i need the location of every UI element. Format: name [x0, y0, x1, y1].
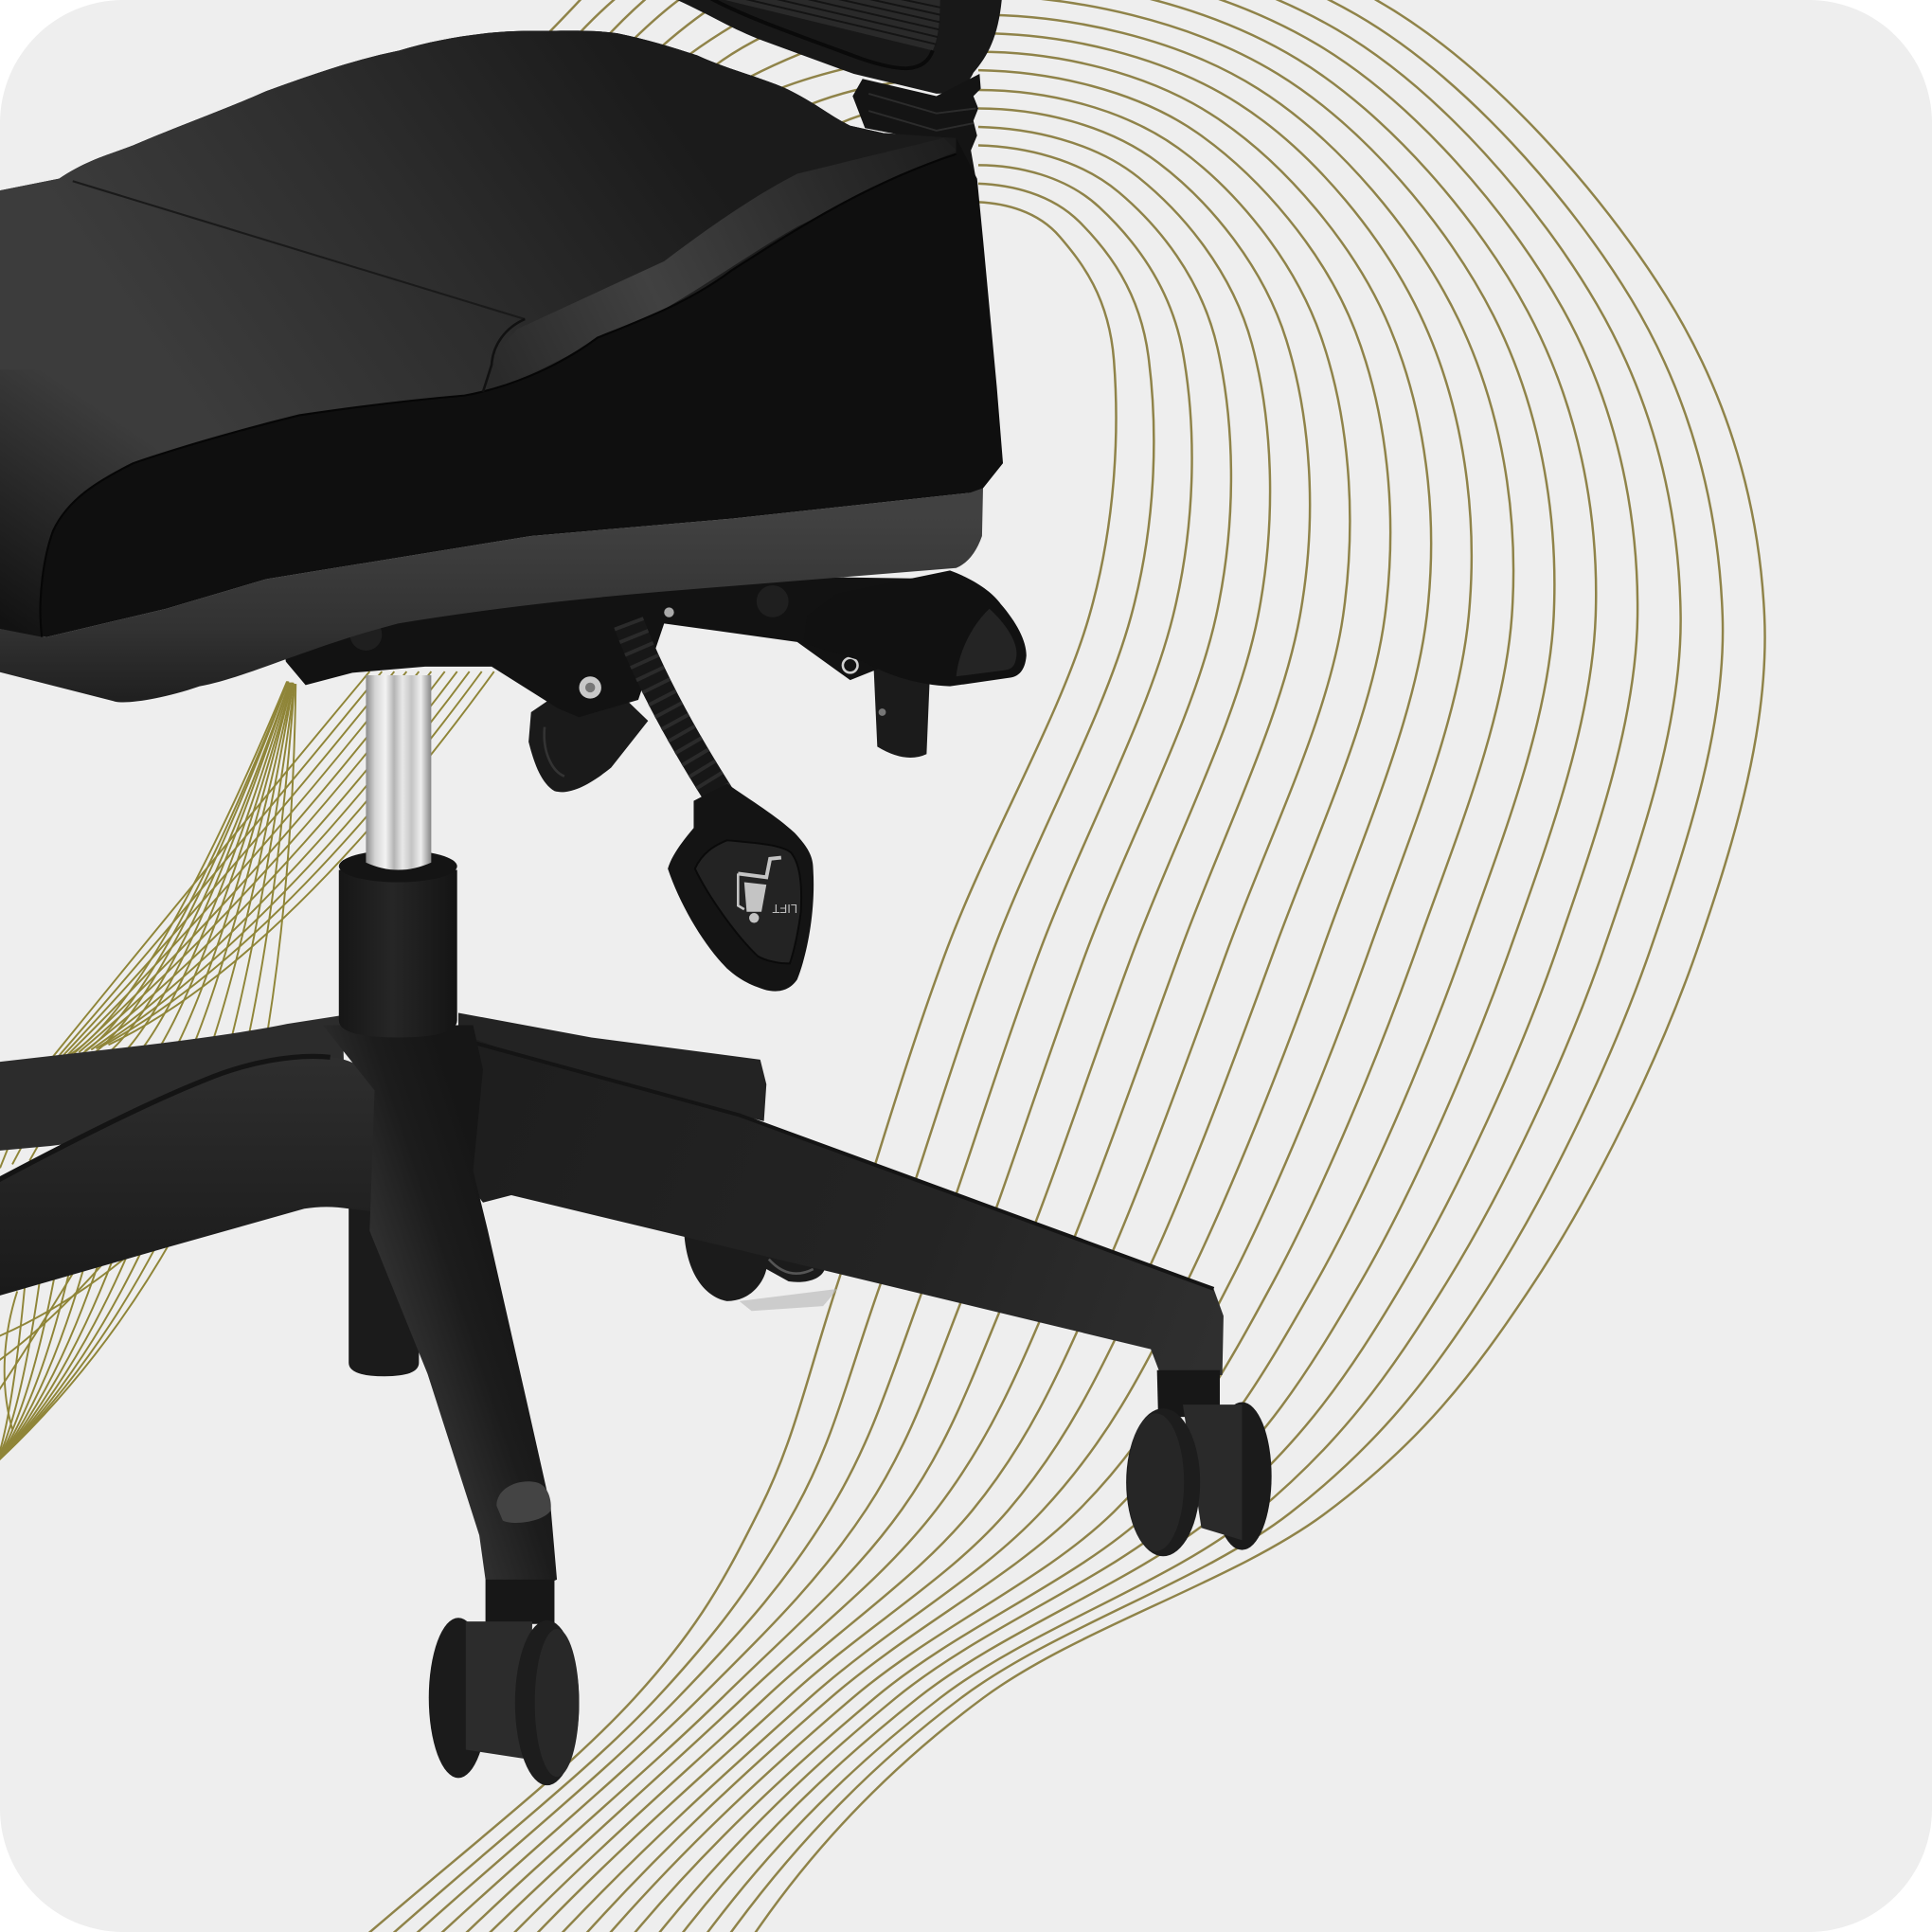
- chair: front-right base arm: [458, 1032, 1224, 1375]
- gold wave lines: arcs left of the backrest: [537, 0, 924, 127]
- chair: seat seams: [41, 154, 957, 637]
- gold mesh lines: fan under the left arm: [0, 1239, 172, 1462]
- chair: vertical tab: [873, 666, 930, 758]
- gold mesh lines: fan behind the column: [0, 671, 494, 1168]
- chair: lift handle: [668, 783, 814, 992]
- gold wave lines: main ribbon: [367, 0, 1765, 1932]
- chair: headrest back panel: [666, 0, 1002, 94]
- chair: chrome piston: [366, 675, 431, 870]
- text: LIFT label: LIFT: [772, 902, 797, 916]
- chair: mechanism bracket: [282, 577, 961, 717]
- chair: hub and front leg: [323, 1025, 557, 1587]
- chair: seat top surface: [0, 25, 971, 653]
- chair: seat tray: [0, 478, 983, 703]
- chair: gas lift sleeve: [339, 850, 457, 1037]
- chair: rear stub leg: [349, 1183, 419, 1376]
- chair: back-right base arm: [458, 1012, 766, 1121]
- chair: right paddle knob: [803, 570, 1027, 687]
- chair: left tilt lever: [528, 690, 648, 792]
- chair: far caster: [684, 1227, 838, 1311]
- chair: back-left base arm: [0, 1015, 345, 1151]
- chair: seat cushion side: [0, 30, 1003, 637]
- chair: front caster: [429, 1580, 579, 1785]
- chair: flexible lift cable: [629, 622, 721, 798]
- chair: right caster: [1126, 1370, 1272, 1556]
- chair: front-left base arm: [0, 1056, 394, 1297]
- icon: seated figure: [738, 858, 781, 922]
- seat side bolster: [536, 151, 903, 360]
- chair: backrest neck connector: [852, 74, 981, 179]
